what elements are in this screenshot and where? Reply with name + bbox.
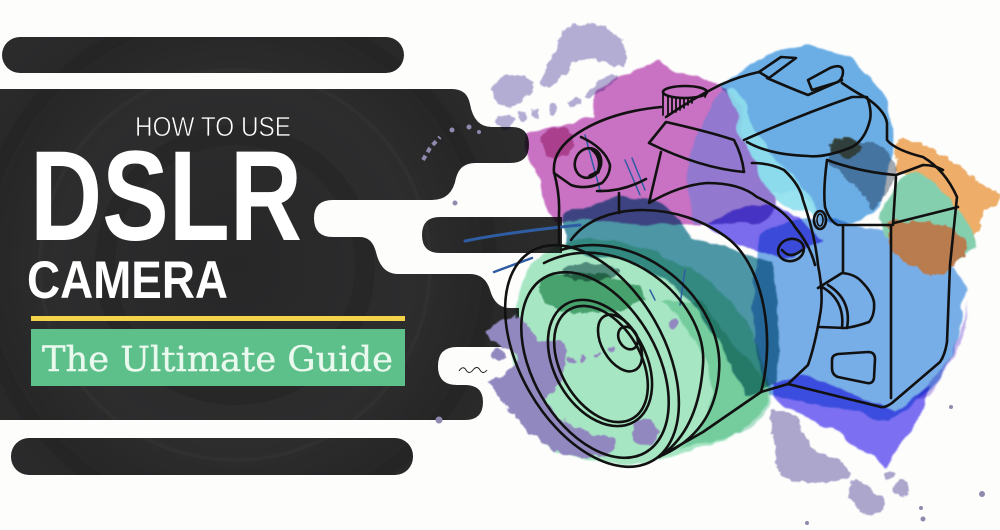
watercolor: green wash right <box>880 172 975 262</box>
watercolor: dark magenta spot <box>542 126 574 158</box>
heading: camera: CAMERA <box>27 251 228 310</box>
lens barrel arcs <box>544 210 767 457</box>
camera hot shoe <box>759 57 843 95</box>
blue ink streaks <box>465 135 685 305</box>
paint splatter: lower right lavender <box>770 411 909 516</box>
watercolor: violet bottom wash <box>772 375 930 468</box>
squiggle <box>459 368 487 372</box>
watercolor: dark green lens shadow <box>537 273 645 313</box>
paint splatter: lower left purple <box>486 316 679 457</box>
camera prism <box>649 122 744 172</box>
watercolor: indigo streak <box>705 205 825 258</box>
watercolor: green barrel wash <box>660 300 772 450</box>
watercolor: blue body wash <box>754 217 968 420</box>
watercolor: blue top wash <box>722 46 893 226</box>
paint specks <box>423 124 985 525</box>
title text <box>27 111 302 310</box>
watercolor: magenta wash <box>524 60 748 225</box>
watercolor: lilac edge <box>915 300 970 400</box>
lens rings <box>469 215 715 497</box>
yellow divider <box>31 316 405 321</box>
subtitle text: The Ultimate Guide <box>42 340 393 380</box>
subtitle banner <box>31 329 405 386</box>
camera viewfinder <box>554 137 610 187</box>
camera line drawing <box>469 57 958 497</box>
watercolor: dark brown spot <box>830 139 862 157</box>
watercolor: violet wash <box>687 92 775 224</box>
camera grip <box>824 160 958 398</box>
watercolor: mint lens wash <box>512 240 768 465</box>
watercolor: brown wash <box>888 221 968 277</box>
watercolor: orange wash <box>895 138 1000 250</box>
watercolor: cyan edge <box>728 90 815 215</box>
dark lens background shape <box>0 37 562 475</box>
heading: DSLR: DSLR <box>30 125 302 268</box>
camera body details <box>597 152 822 384</box>
paint splatter: top lavender <box>492 23 626 130</box>
watercolor: teal barrel wash <box>565 198 778 395</box>
camera buttons <box>776 211 826 264</box>
watercolor: dark grey overlap <box>830 139 897 210</box>
camera display <box>832 352 875 383</box>
camera dial <box>663 86 707 115</box>
camera body outline <box>554 72 957 457</box>
heading: how to use: HOW TO USE <box>135 111 291 142</box>
camera side knob <box>818 273 874 328</box>
watercolor: dark teal lens shadow <box>562 263 618 281</box>
camera top panel <box>744 97 871 156</box>
